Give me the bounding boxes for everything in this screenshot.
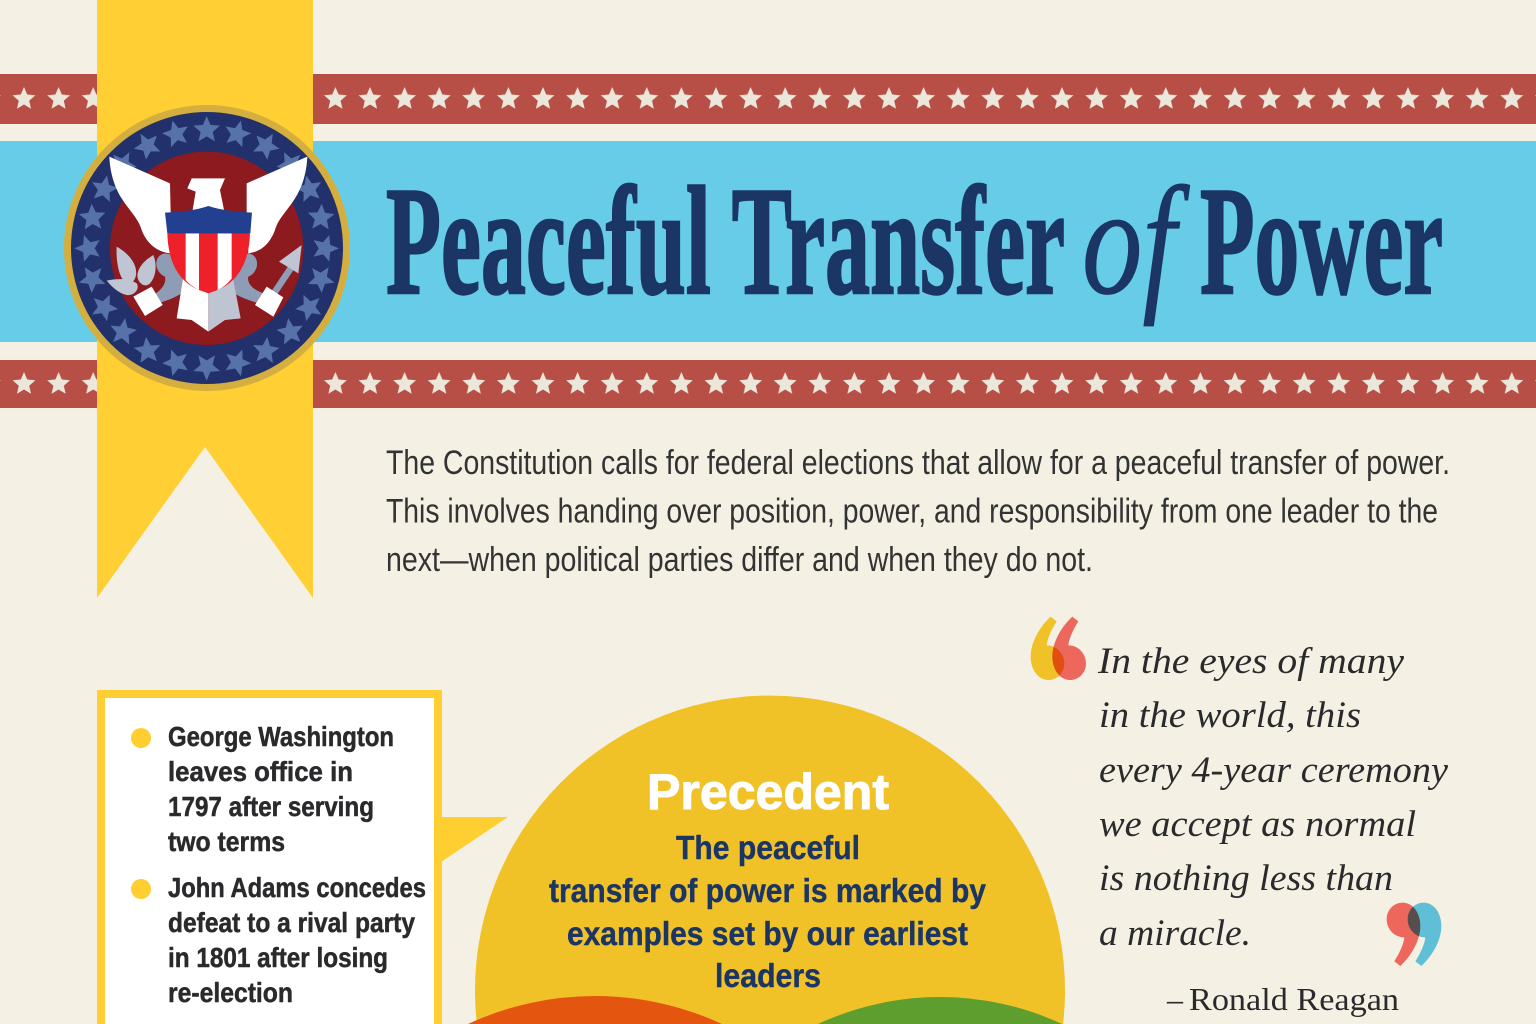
orange circle	[468, 996, 722, 1024]
panel: precedent circle	[468, 696, 1065, 1024]
intro paragraph	[386, 444, 1450, 579]
quote text: is nothing less than	[1099, 858, 1393, 899]
title banner	[0, 141, 1536, 342]
bullet: Adams	[131, 872, 426, 1008]
bullet: Washington: leaves office in	[168, 756, 353, 787]
icon: opening quote mark	[1031, 617, 1086, 680]
bullet: Washington: George Washington	[168, 721, 394, 752]
quote text: in the world, this	[1099, 695, 1361, 736]
intro paragraph: next—when political parties differ and when they do not.	[386, 541, 1093, 579]
precedent description: transfer of power is marked by	[549, 872, 987, 909]
bullet: Washington: two terms	[168, 826, 285, 857]
bullet: Adams: re-election	[168, 977, 293, 1008]
presidential seal	[64, 105, 350, 391]
callout pointer	[438, 817, 508, 864]
quote attribution: Ronald Reagan	[1189, 981, 1399, 1017]
quote attribution: –	[1166, 981, 1184, 1017]
bullet: Adams: John Adams concedes	[168, 872, 426, 903]
precedent description	[549, 829, 987, 994]
quote text: In the eyes of many	[1097, 641, 1405, 682]
quote text: every 4-year ceremony	[1099, 750, 1449, 791]
panel: Reagan quote	[1031, 617, 1449, 1017]
yellow ribbon	[97, 0, 313, 598]
bullet: Adams: in 1801 after losing	[168, 942, 388, 973]
quote text	[1097, 641, 1449, 954]
panel: bullet callout	[97, 690, 508, 1024]
precedent heading: Precedent	[647, 764, 889, 820]
icon: closing quote mark	[1387, 903, 1441, 966]
title: of	[1082, 155, 1190, 327]
green circle	[818, 997, 1062, 1024]
eagle	[107, 157, 307, 332]
quote text: we accept as normal	[1099, 804, 1416, 845]
precedent description: examples set by our earliest	[567, 915, 968, 952]
bullet: Adams: defeat to a rival party	[168, 907, 415, 938]
bottom star stripe	[0, 360, 1536, 408]
bullet: Washington: 1797 after serving	[168, 791, 374, 822]
bullet: Washington	[131, 721, 394, 857]
precedent description: The peaceful	[676, 829, 860, 866]
top star stripe	[0, 74, 1536, 124]
precedent description: leaders	[715, 957, 821, 994]
quote text: a miracle.	[1099, 913, 1251, 954]
title: Peaceful Transfer	[386, 155, 1065, 327]
ring of stars	[74, 116, 339, 381]
